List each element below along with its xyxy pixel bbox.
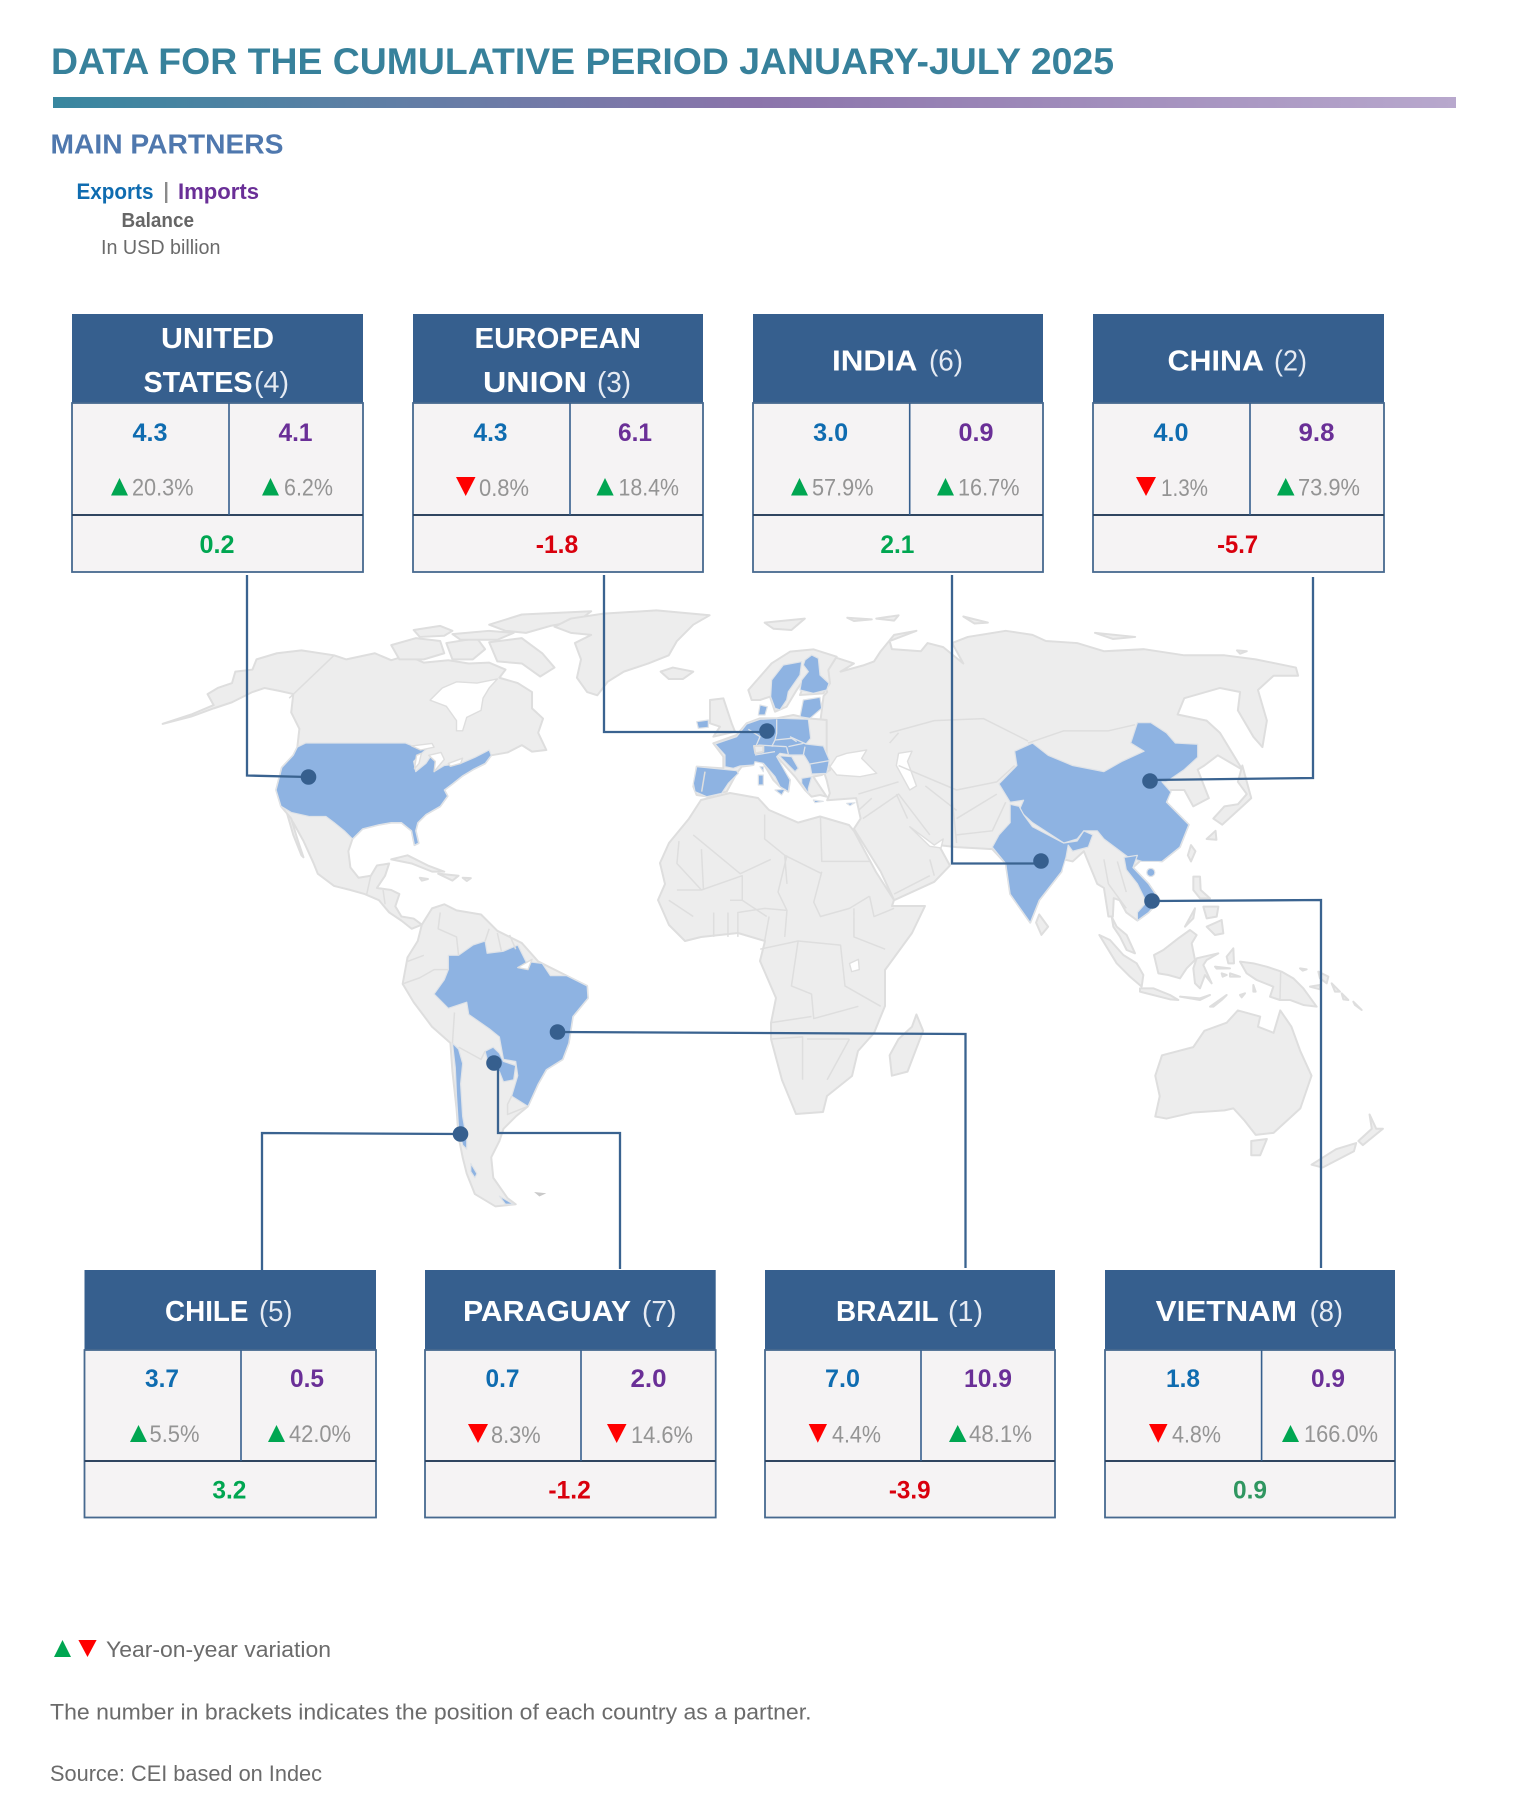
- header: India: [753, 314, 1043, 403]
- header: Paraguay: PARAGUAY: [463, 1296, 631, 1328]
- imports variation: 166.0%: [1304, 1421, 1378, 1448]
- map: Baja California: [287, 814, 303, 857]
- header: United States: (4): [254, 367, 289, 399]
- balance value: 0.2: [200, 531, 234, 559]
- map: Japan and Taiwan: [1188, 766, 1251, 861]
- icon: up arrow: [949, 1425, 966, 1442]
- header: Chile: (5): [259, 1296, 292, 1328]
- imports value: 0.9: [1311, 1365, 1345, 1393]
- marker: Brazil: [550, 1024, 565, 1040]
- map: the Americas: [163, 610, 771, 1206]
- map: EU members highlighted: [693, 655, 855, 806]
- exports value: 4.0: [1154, 419, 1188, 447]
- map: Southeast Asia and Pacific islands: [1099, 877, 1362, 1010]
- connector: European Union: [604, 575, 765, 732]
- panel: India: [753, 314, 1043, 572]
- title: DATA FOR THE CUMULATIVE PERIOD JANUARY-JULY 2025: [51, 40, 1114, 82]
- icon: up arrow: [596, 478, 614, 496]
- map: Vietnam highlighted: [1124, 855, 1160, 921]
- panel: European Union: [413, 314, 703, 572]
- map: South America: [403, 904, 588, 1206]
- exports variation: 8.3%: [491, 1422, 541, 1449]
- icon: up arrow: [268, 1425, 285, 1442]
- icon: down arrow: [456, 477, 476, 496]
- balance value: 2.1: [880, 531, 914, 559]
- imports value: 10.9: [964, 1365, 1012, 1393]
- panel: China: [1093, 314, 1384, 572]
- icon: down arrow: [809, 1424, 827, 1443]
- imports value: 0.5: [290, 1365, 324, 1393]
- footnote: brackets explanation: The number in brackets indicates the position of each country as a partner.: [50, 1700, 812, 1724]
- header: European Union: UNION: [483, 367, 587, 399]
- map: Europe: [693, 649, 877, 806]
- exports variation: 0.8%: [479, 475, 529, 502]
- footnote: year-on-year variation: Year-on-year variation: [106, 1637, 331, 1662]
- marker: Chile: [453, 1126, 468, 1142]
- legend: exports: Exports: [76, 179, 154, 204]
- connector: Vietnam: [1152, 900, 1321, 1268]
- header: Brazil: BRAZIL: [836, 1296, 939, 1328]
- header: India: (6): [929, 346, 963, 378]
- map: Eurasia and Oceania: [738, 615, 1383, 1168]
- map: Scandinavia: [748, 649, 837, 712]
- exports value: 0.7: [486, 1365, 520, 1393]
- marker: European Union: [759, 723, 775, 739]
- exports value: 3.7: [145, 1365, 179, 1393]
- icon: up arrow: [1282, 1425, 1299, 1442]
- header: Brazil: [765, 1270, 1055, 1350]
- exports value: 3.0: [813, 419, 848, 447]
- connector: Chile: [262, 1133, 460, 1270]
- map: Caspian Sea: [896, 751, 916, 790]
- icon: up arrow: [130, 1425, 147, 1442]
- panel: Chile: [84, 1270, 376, 1518]
- map: Iceland: [661, 668, 693, 679]
- map: Persian Gulf: [910, 827, 943, 848]
- map: Paraguay highlighted: [485, 1047, 516, 1082]
- map: China highlighted: [999, 723, 1198, 861]
- panel: United States: [72, 314, 363, 572]
- icon: up arrow: [937, 478, 954, 496]
- map: continental Europe: [693, 715, 830, 797]
- map: Hudson Bay: [430, 679, 497, 731]
- legend: separator: [165, 182, 167, 203]
- header: European Union: EUROPEAN: [474, 323, 641, 355]
- header: China: (2): [1274, 346, 1307, 378]
- legend: unit: In USD billion: [101, 237, 220, 259]
- map: Australia: [1155, 1010, 1312, 1135]
- icon: up arrow: [111, 478, 128, 496]
- imports variation: 16.7%: [958, 474, 1020, 502]
- header: Brazil: (1): [948, 1296, 983, 1328]
- imports value: 2.0: [630, 1365, 666, 1393]
- map: Great Britain: [710, 698, 735, 737]
- marker: Vietnam: [1144, 893, 1160, 909]
- exports variation: 57.9%: [812, 474, 874, 502]
- imports value: 0.9: [958, 419, 994, 447]
- map: Asia and Russia: [816, 631, 1298, 923]
- exports variation: 1.3%: [1161, 475, 1208, 502]
- icon: up arrow: [791, 478, 808, 496]
- map: Falkland Islands: [534, 1192, 546, 1197]
- icon: up arrow: [1277, 478, 1294, 496]
- header: China: [1093, 314, 1384, 403]
- map: United States highlighted: [276, 743, 491, 845]
- header: Chile: CHILE: [165, 1296, 248, 1328]
- header: Vietnam: VIETNAM: [1156, 1296, 1297, 1328]
- map: Black Sea: [830, 750, 877, 777]
- legend: imports: Imports: [178, 179, 259, 204]
- balance value: -3.9: [889, 1477, 931, 1505]
- header: Paraguay: [425, 1270, 716, 1350]
- world map: [163, 610, 1383, 1206]
- legend: balance: Balance: [122, 210, 194, 232]
- header: Vietnam: (8): [1310, 1296, 1343, 1328]
- section heading: main partners: MAIN PARTNERS: [50, 128, 284, 160]
- map: Chile highlighted: [452, 1043, 514, 1204]
- imports value: 4.1: [278, 419, 313, 447]
- title gradient bar: [53, 97, 1456, 108]
- icon: down arrow: [607, 1424, 626, 1443]
- header: Chile: [84, 1270, 376, 1350]
- imports variation: 18.4%: [618, 474, 679, 502]
- legend: [76, 179, 259, 259]
- map: Hainan highlighted: [1147, 868, 1155, 877]
- exports value: 4.3: [132, 419, 168, 447]
- map: Africa: [658, 793, 925, 1114]
- marker: United States: [301, 769, 316, 785]
- map: Brazil highlighted: [434, 941, 588, 1106]
- map: Lake Victoria: [849, 959, 859, 972]
- exports variation: 5.5%: [150, 1421, 200, 1448]
- imports variation: 6.2%: [284, 474, 333, 502]
- icon: down arrow: [1149, 1424, 1168, 1443]
- imports variation: 73.9%: [1298, 474, 1360, 502]
- map: India highlighted: [992, 804, 1093, 923]
- map: Greenland: [554, 610, 710, 695]
- map: Arctic archipelagos: [765, 615, 1247, 654]
- imports value: 6.1: [618, 419, 652, 447]
- map: Madagascar: [890, 1014, 923, 1076]
- marker: India: [1033, 853, 1049, 869]
- map: Amazon mouth: [518, 959, 532, 970]
- marker: Paraguay: [486, 1055, 502, 1071]
- header: United States: [72, 314, 363, 403]
- panel: Vietnam: [1105, 1270, 1395, 1518]
- header: European Union: (3): [597, 367, 631, 399]
- exports value: 1.8: [1166, 1365, 1200, 1393]
- connector: China: [1150, 577, 1313, 780]
- icon: down arrow: [1136, 477, 1156, 496]
- icon: down arrow: [468, 1424, 488, 1443]
- exports variation: 4.8%: [1172, 1422, 1221, 1449]
- header: European Union: [413, 314, 703, 403]
- imports variation: 42.0%: [289, 1421, 351, 1448]
- imports variation: 14.6%: [631, 1422, 693, 1449]
- header: United States: UNITED: [161, 323, 274, 355]
- icon: up arrow: [54, 1640, 71, 1657]
- icon: up arrow: [262, 478, 279, 496]
- balance value: -1.2: [548, 1477, 591, 1505]
- header: Paraguay: (7): [642, 1296, 676, 1328]
- map: Tasmania: [1251, 1139, 1267, 1155]
- map: Sri Lanka: [1036, 914, 1048, 935]
- exports value: 4.3: [474, 419, 508, 447]
- exports variation: 20.3%: [132, 474, 194, 502]
- header: United States: STATES: [144, 367, 252, 399]
- marker: China: [1142, 773, 1158, 789]
- connector: Paraguay: [494, 1063, 620, 1269]
- exports value: 7.0: [825, 1365, 860, 1393]
- map: Caribbean islands: [391, 855, 471, 881]
- map: Arctic islands: [391, 611, 591, 677]
- header: India: INDIA: [832, 346, 918, 378]
- balance value: -5.7: [1217, 531, 1258, 559]
- exports variation: 4.4%: [832, 1422, 881, 1449]
- map: Great Lakes: [412, 743, 463, 772]
- connector: United States: [247, 575, 308, 777]
- imports variation: 48.1%: [969, 1421, 1032, 1448]
- header: Vietnam: [1105, 1270, 1395, 1350]
- connector: India: [952, 575, 1040, 864]
- panel: Brazil: [765, 1270, 1055, 1518]
- map: New Zealand: [1312, 1114, 1383, 1168]
- header: China: CHINA: [1168, 346, 1264, 378]
- balance value: 3.2: [212, 1477, 246, 1505]
- imports value: 9.8: [1298, 419, 1335, 447]
- map: North America: [163, 650, 546, 929]
- footnote: source: Source: CEI based on Indec: [50, 1761, 322, 1786]
- connector: Brazil: [557, 1032, 966, 1268]
- balance value: -1.8: [536, 531, 578, 559]
- panel: Paraguay: [425, 1270, 716, 1518]
- balance value: 0.9: [1233, 1477, 1267, 1505]
- icon: down arrow: [78, 1640, 97, 1657]
